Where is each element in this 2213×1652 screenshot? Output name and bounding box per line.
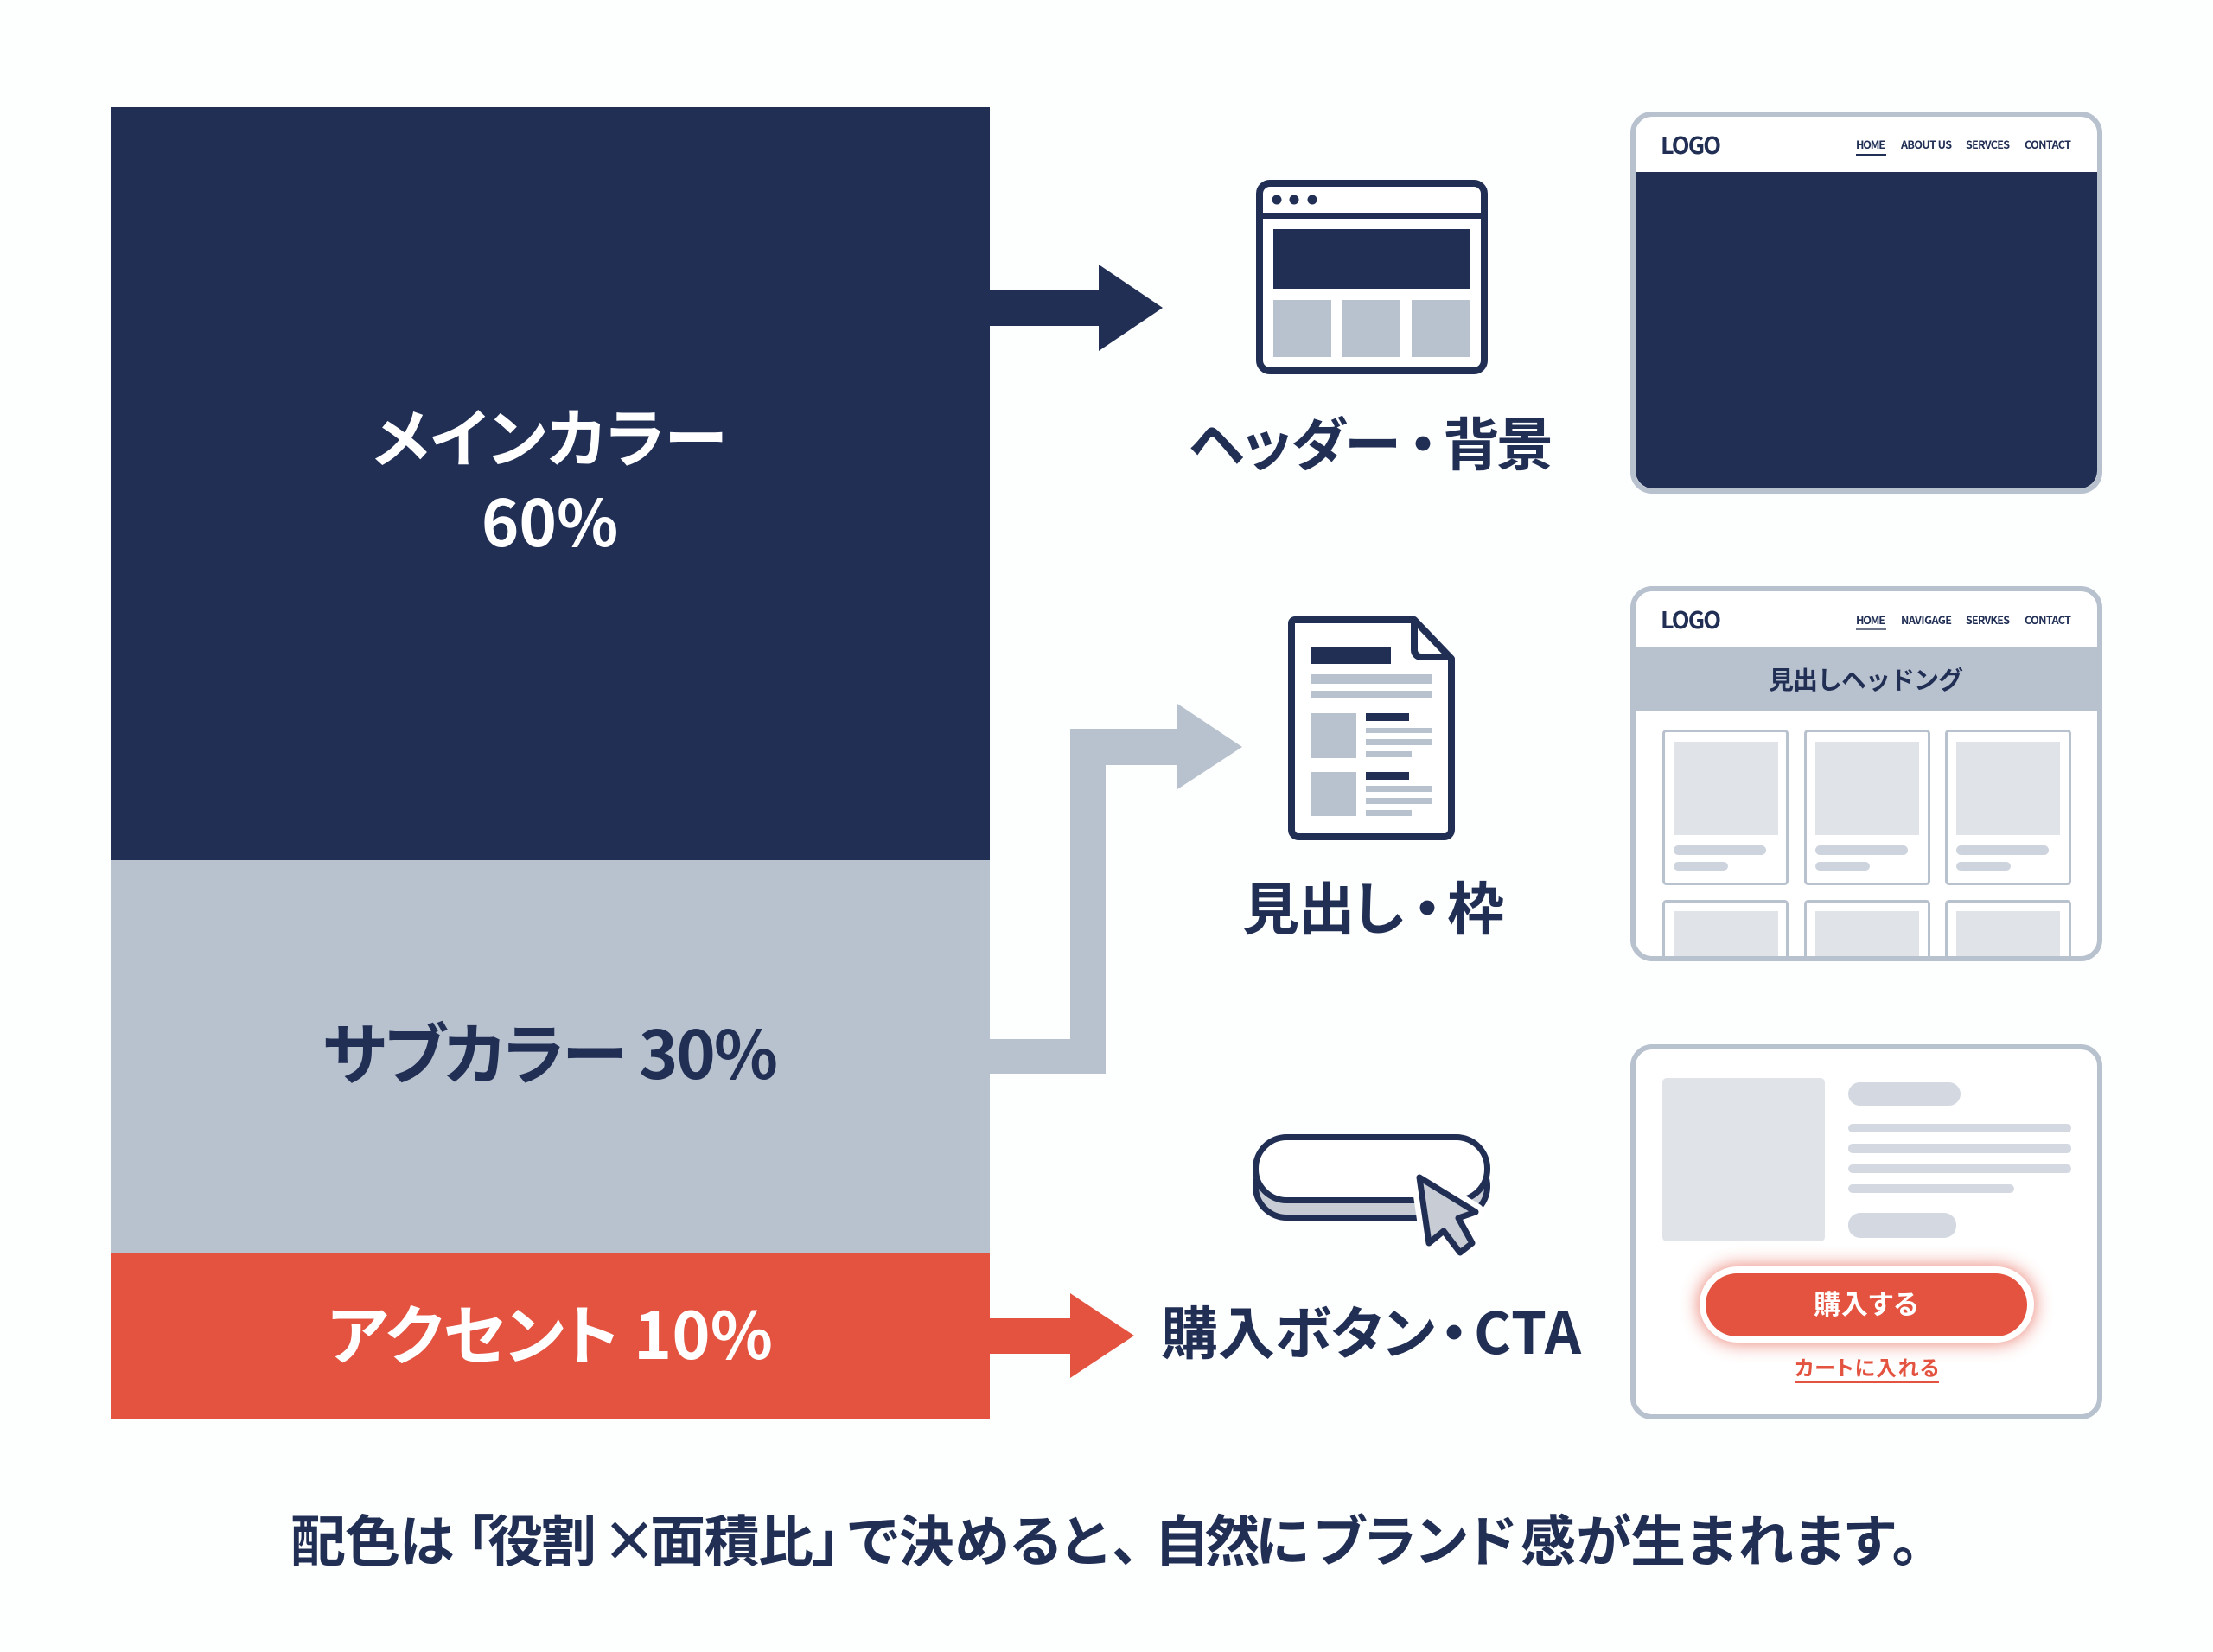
heading band <box>1633 647 2100 711</box>
product image placeholder <box>1662 1078 1825 1241</box>
label: purchase button and CTA: ・ <box>1425 1288 1483 1371</box>
label: header and background: ・ <box>1394 399 1451 482</box>
label: purchase button and CTA: CTA <box>1474 1288 1582 1371</box>
label: purchase button and CTA: 購入ボタン <box>1161 1288 1435 1371</box>
label: headings and frames: 見出し <box>1242 864 1404 947</box>
main colour block 60% <box>111 107 990 860</box>
footer message: 」 <box>813 1498 840 1578</box>
logo: LOGO <box>1661 602 1721 635</box>
main colour block 60%: メインカラー <box>373 388 727 481</box>
sub colour block 30%: サブカラー 30% <box>322 1003 778 1099</box>
card grid <box>1662 730 2071 956</box>
footer message: 面積比 <box>650 1498 813 1578</box>
footer message: 役割 <box>488 1498 596 1578</box>
navigation: CONTACT <box>2025 136 2071 152</box>
arrow: sub colour to headings <box>990 704 1242 1074</box>
footer message: 感が <box>1521 1498 1631 1578</box>
panel: product page mockup with CTA <box>1633 1047 2100 1417</box>
CTA button: 購入する <box>1814 1283 1918 1322</box>
navigation <box>1856 136 2071 156</box>
navigation <box>1856 611 2071 630</box>
accent colour block 10% <box>111 1253 990 1419</box>
CTA button <box>1700 1266 2034 1343</box>
footer message: 。 <box>1891 1498 1919 1578</box>
footer message: 自然に <box>1154 1498 1309 1578</box>
navigation: HOME <box>1856 611 1885 628</box>
label: headings and frames: 枠 <box>1447 864 1504 947</box>
navigation: HOME <box>1856 136 1885 152</box>
label: header and background: ヘッダー <box>1189 399 1400 482</box>
navigation: SERVKES <box>1966 611 2010 628</box>
icon: document <box>1291 620 1451 837</box>
panel: website mockup with navy hero <box>1633 114 2100 491</box>
footer message: 配色は <box>290 1498 454 1578</box>
footer message: 生まれます <box>1630 1498 1895 1578</box>
navigation: ABOUT US <box>1900 136 1952 152</box>
label: headings and frames: ・ <box>1399 864 1456 947</box>
footer message: 「 <box>466 1498 494 1578</box>
product text placeholders <box>1848 1082 2071 1238</box>
sub colour block 30% <box>111 860 990 1253</box>
icon: browser window <box>1256 183 1487 371</box>
panel: proportion bar <box>111 107 990 1419</box>
footer message: 、 <box>1112 1498 1139 1578</box>
arrow: accent colour to CTA <box>990 1293 1134 1378</box>
secondary link: カートに入れる <box>1795 1351 1939 1381</box>
footer message: ブランド <box>1314 1498 1516 1578</box>
footer message: × <box>602 1498 657 1578</box>
navigation: NAVIGAGE <box>1901 611 1952 628</box>
main colour block 60%: 60% <box>482 473 618 565</box>
navigation: CONTACT <box>2025 611 2071 628</box>
heading band: 見出しヘッドング <box>1769 660 1963 697</box>
footer message: で決めると <box>848 1498 1107 1578</box>
navigation: SERVCES <box>1966 136 2010 152</box>
logo: LOGO <box>1661 127 1721 161</box>
label: header and background: 背景 <box>1443 399 1553 482</box>
accent colour block 10%: アクセント 10% <box>328 1284 773 1378</box>
arrow: main colour to header <box>990 265 1163 351</box>
icon: button with cursor <box>1255 1138 1487 1253</box>
panel: website mockup with heading band and cards <box>1633 589 2100 987</box>
